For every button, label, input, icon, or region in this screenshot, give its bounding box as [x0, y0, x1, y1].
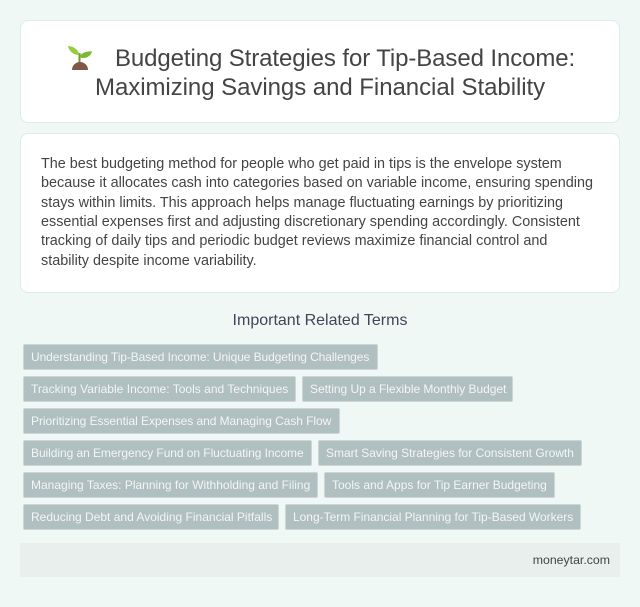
tag: [23, 472, 318, 498]
tag: [23, 376, 296, 402]
summary paragraph: tracking of daily tips and periodic budget reviews maximize financial control and: [41, 233, 547, 249]
tag: [318, 440, 582, 466]
summary paragraph: because it allocates cash into categories based on variable income, ensuring spending: [41, 175, 593, 191]
summary paragraph: essential expenses first and adjusting discretionary spending accordingly. Consistent: [41, 214, 580, 230]
summary paragraph: The best budgeting method for people who get paid in tips is the envelope system: [41, 156, 562, 172]
title text: [95, 45, 575, 101]
tag: [23, 504, 279, 530]
summary paragraph: stays within limits. This approach helps manage fluctuating earnings by prioritizing: [41, 194, 563, 210]
footer source text: moneytar.com: [533, 553, 610, 567]
tag: [302, 376, 513, 402]
tag: Tracking Variable Income: Tools and Techniques: [31, 382, 288, 396]
tag: [23, 408, 340, 434]
summary card: [20, 133, 620, 293]
tag: Prioritizing Essential Expenses and Managing Cash Flow: [31, 414, 331, 428]
tag: [23, 440, 312, 466]
tag: Tools and Apps for Tip Earner Budgeting: [332, 478, 547, 492]
tag: [324, 472, 555, 498]
summary paragraph: stability despite income variability.: [41, 252, 257, 268]
tag: Reducing Debt and Avoiding Financial Pitfalls: [31, 510, 272, 524]
tag: Smart Saving Strategies for Consistent Growth: [326, 446, 574, 460]
icon: seedling: [68, 46, 92, 70]
tag: Building an Emergency Fund on Fluctuating Income: [31, 446, 304, 460]
tag: [285, 504, 581, 530]
tag: Understanding Tip-Based Income: Unique Budgeting Challenges: [31, 350, 369, 364]
heading: related terms: Important Related Terms: [233, 312, 407, 329]
tag: Long-Term Financial Planning for Tip-Based Workers: [293, 510, 573, 524]
tag: [23, 344, 378, 370]
footer: [20, 543, 620, 577]
tag: Managing Taxes: Planning for Withholding and Filing: [31, 478, 310, 492]
tag: Setting Up a Flexible Monthly Budget: [310, 382, 506, 396]
related terms tags: [23, 344, 582, 530]
title text: Maximizing Savings and Financial Stability: [95, 74, 545, 101]
title text: Budgeting Strategies for Tip-Based Income:: [115, 45, 575, 72]
title card: [20, 20, 620, 123]
summary paragraph: [41, 156, 593, 268]
